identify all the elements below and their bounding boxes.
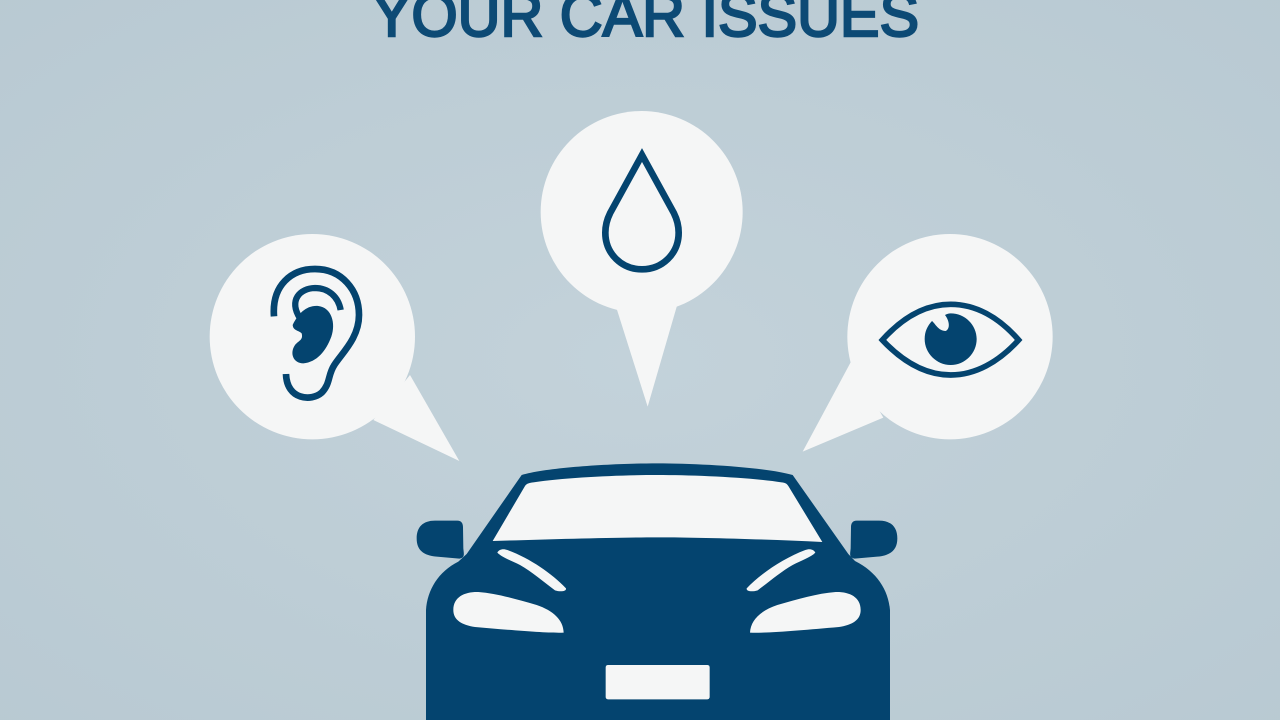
panel: drop speech bubble — [541, 111, 743, 407]
car mirror: left — [417, 521, 464, 559]
car mirror: right — [850, 521, 897, 559]
car headlight: left — [453, 592, 564, 633]
car license plate — [606, 665, 710, 699]
icon: water drop — [605, 155, 679, 269]
car brow light: right — [747, 549, 815, 591]
car headlight: right — [750, 592, 861, 633]
car windshield — [493, 475, 822, 542]
panel: eye speech bubble — [803, 234, 1053, 452]
icon: eye — [882, 304, 1019, 375]
car — [417, 463, 897, 720]
car body — [426, 463, 890, 720]
icon: ear — [274, 269, 359, 398]
panel: ear speech bubble — [210, 234, 459, 461]
car brow light: left — [497, 549, 566, 591]
